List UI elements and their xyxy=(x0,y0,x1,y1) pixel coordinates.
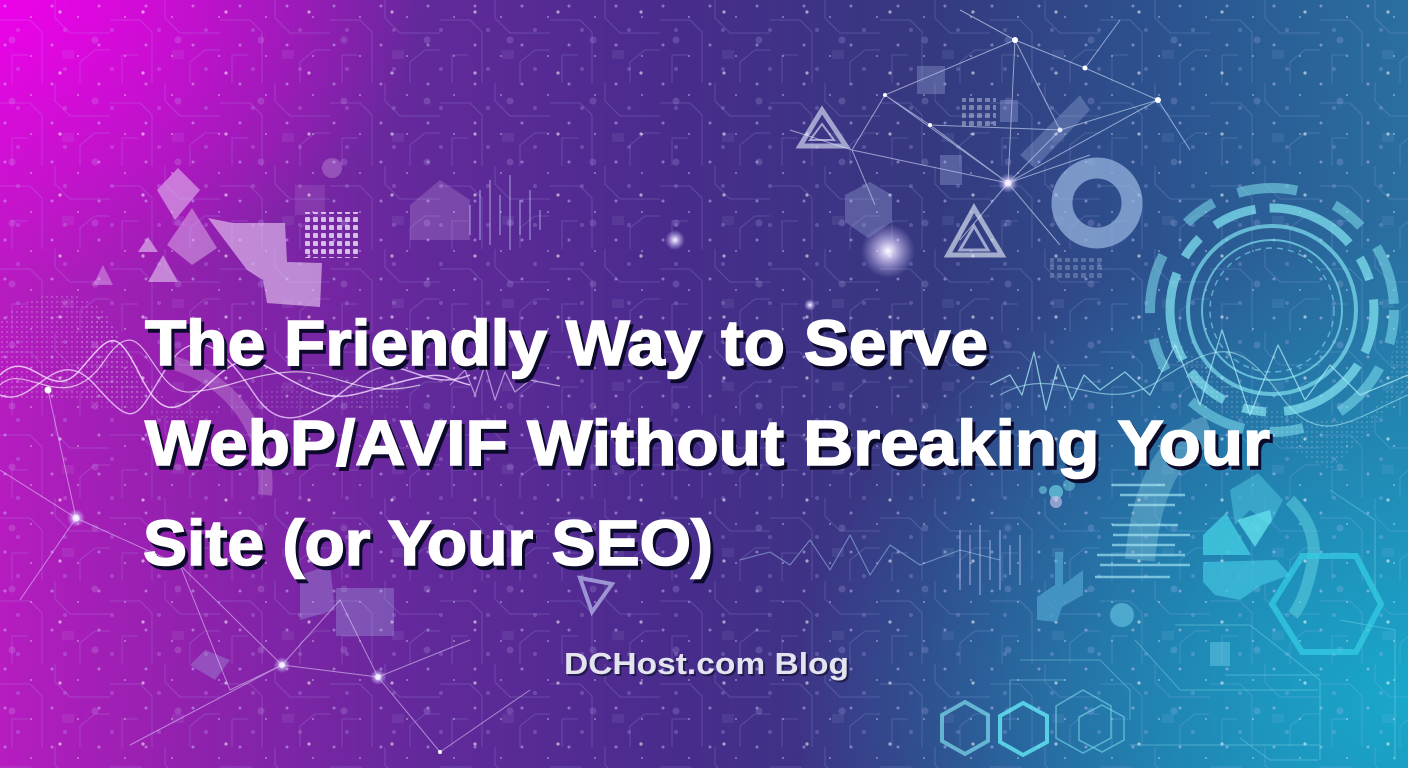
title: The Friendly Way to Serve xyxy=(148,311,991,383)
blog label: DCHost.com Blog xyxy=(564,646,849,681)
title: Site (or Your SEO) xyxy=(146,511,716,583)
blog label: DCHost.com Blog xyxy=(566,648,851,683)
concentric tech circle xyxy=(1150,188,1394,432)
left arc xyxy=(170,362,266,495)
title: The Friendly Way to Serve xyxy=(145,307,988,379)
title: WebP/AVIF Without Breaking Your xyxy=(145,407,1270,479)
equalizer bars xyxy=(470,175,1020,595)
triangle icons xyxy=(800,110,1002,255)
bottom-right circuit traces xyxy=(1010,490,1395,760)
title: Site (or Your SEO) xyxy=(143,507,713,579)
left geometric shape cluster xyxy=(93,158,470,307)
bottom-right chart shapes and hexagons xyxy=(942,430,1381,755)
audio wave meshes xyxy=(0,294,1408,470)
scattered hexagons and squares xyxy=(190,66,1105,680)
top-right network mesh xyxy=(790,10,1190,245)
title: WebP/AVIF Without Breaking Your xyxy=(148,411,1273,483)
ring icon xyxy=(1062,168,1132,238)
glowing lights xyxy=(67,173,1018,685)
audio wave lines xyxy=(0,330,1408,575)
bottom-left network lines xyxy=(0,390,530,752)
title xyxy=(143,307,1273,583)
